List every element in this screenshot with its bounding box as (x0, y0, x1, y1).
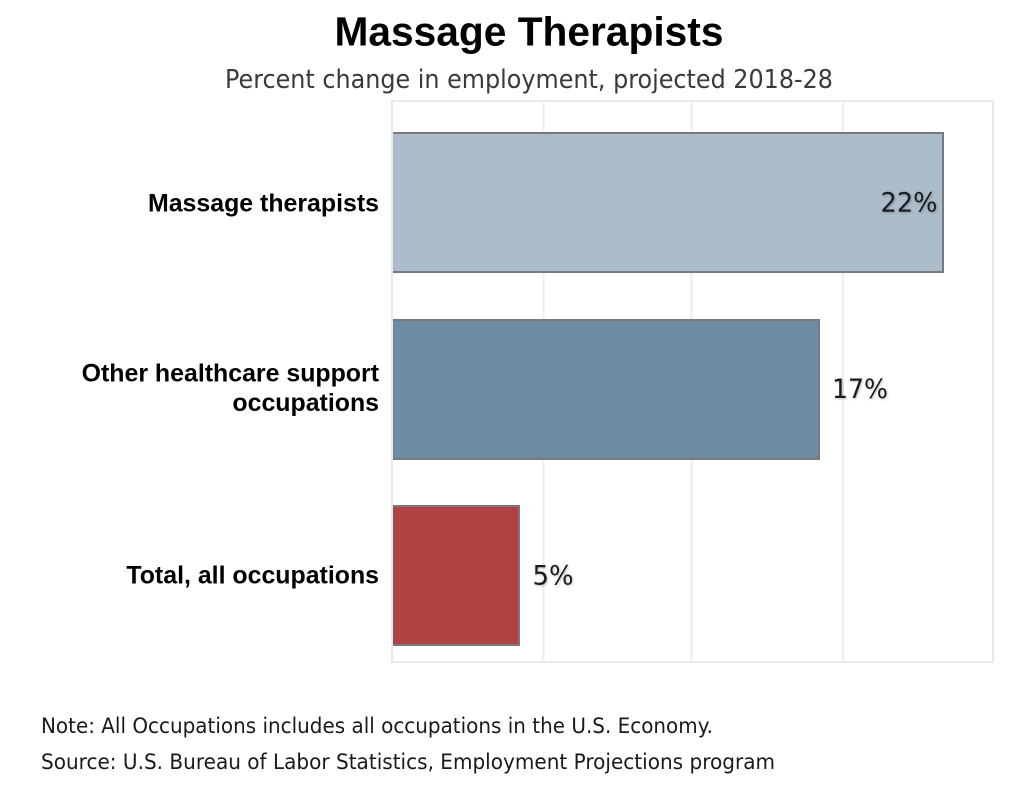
value label: 5%: 5% (532, 560, 574, 592)
bar: massage therapists (393, 133, 943, 272)
subtitle: Percent change in employment, projected 2018-28 (225, 65, 833, 95)
value label: 22%: 22% (880, 188, 938, 218)
value label: 17%: 17% (832, 374, 888, 405)
category label: other healthcare support occupations: occupations (232, 389, 379, 417)
plot frame (392, 101, 993, 662)
bar chart (82, 101, 993, 662)
source: Source: U.S. Bureau of Labor Statistics, Employment Projections program (41, 750, 775, 774)
note: Note: All Occupations includes all occupations in the U.S. Economy. (41, 714, 713, 738)
bar: total, all occupations (393, 506, 519, 645)
category label: massage therapists: Massage therapists (148, 190, 379, 218)
title: Massage Therapists (335, 8, 723, 54)
category label: other healthcare support occupations: Other healthcare support (82, 360, 379, 388)
category label: total, all occupations: Total, all occupations (126, 562, 379, 590)
bar: other healthcare support occupations (393, 320, 819, 459)
